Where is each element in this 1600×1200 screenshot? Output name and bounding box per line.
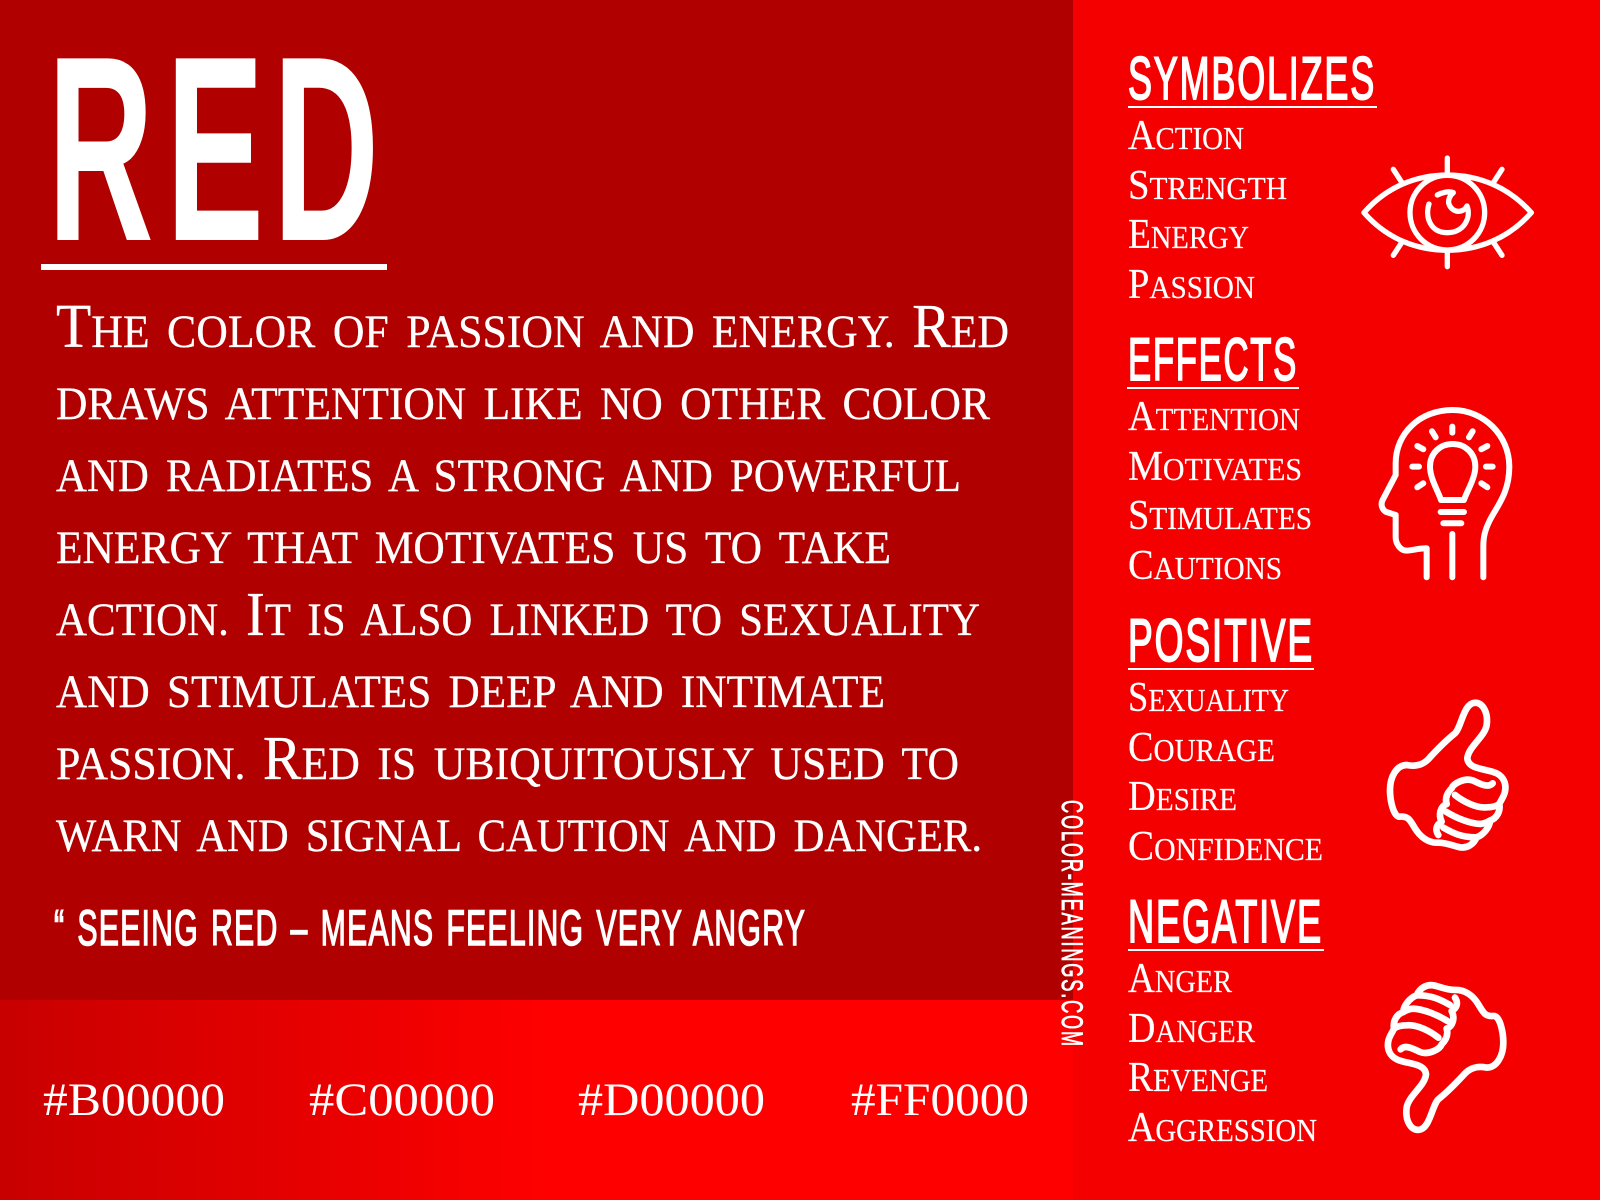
- section: negative: NEGATIVE: [1128, 888, 1323, 955]
- hex codes: [43, 1074, 1029, 1126]
- section: positive: POSITIVE: [1128, 607, 1314, 674]
- section: symbolizes: PASSION: [1128, 262, 1255, 308]
- icon: head with light bulb: [1382, 410, 1509, 577]
- section: negative: [1128, 888, 1324, 1151]
- website credit: COLOR-MEANINGS.COM: [1055, 800, 1088, 1048]
- section: symbolizes: SYMBOLIZES: [1128, 45, 1376, 112]
- hex codes: #C00000: [309, 1074, 495, 1126]
- section: effects: MOTIVATES: [1128, 444, 1302, 490]
- section: symbolizes: ACTION: [1128, 113, 1244, 159]
- left panel background: [0, 0, 1073, 1000]
- colour gradient band: [0, 1000, 1073, 1200]
- section: negative: ANGER: [1128, 956, 1233, 1002]
- section: negative: DANGER: [1128, 1006, 1256, 1052]
- section: positive: CONFIDENCE: [1128, 824, 1323, 870]
- description paragraph: WARN AND SIGNAL CAUTION AND DANGER.: [56, 810, 982, 862]
- section: symbolizes: ENERGY: [1128, 212, 1249, 258]
- description paragraph: PASSION. RED IS UBIQUITOUSLY USED TO: [56, 725, 959, 793]
- description paragraph: ACTION. IT IS ALSO LINKED TO SEXUALITY: [56, 581, 980, 649]
- description paragraph: ENERGY THAT MOTIVATES US TO TAKE: [56, 522, 891, 574]
- section: positive: [1128, 607, 1323, 870]
- section: effects: [1127, 326, 1312, 589]
- section: effects: EFFECTS: [1128, 326, 1298, 393]
- right panel background: [1073, 0, 1600, 1200]
- description paragraph: AND STIMULATES DEEP AND INTIMATE: [56, 666, 885, 718]
- hex codes: #B00000: [43, 1074, 225, 1126]
- section: positive: SEXUALITY: [1128, 675, 1289, 721]
- quote: “ SEEING RED – MEANS FEELING VERY ANGRY: [54, 900, 806, 956]
- section: positive: DESIRE: [1128, 774, 1237, 820]
- section: symbolizes: [1128, 45, 1377, 308]
- section: negative: AGGRESSION: [1128, 1105, 1317, 1151]
- hex codes: #D00000: [578, 1074, 765, 1126]
- description paragraph: AND RADIATES A STRONG AND POWERFUL: [56, 450, 961, 502]
- section: positive: COURAGE: [1128, 725, 1275, 771]
- icon: thumbs up: [1390, 703, 1505, 847]
- section: negative: REVENGE: [1128, 1055, 1268, 1101]
- section: effects: STIMULATES: [1128, 493, 1312, 539]
- section: effects: ATTENTION: [1128, 394, 1300, 440]
- description paragraph: DRAWS ATTENTION LIKE NO OTHER COLOR: [56, 378, 991, 430]
- section: effects: CAUTIONS: [1128, 543, 1282, 589]
- section: symbolizes: STRENGTH: [1128, 163, 1287, 209]
- hex codes: #FF0000: [851, 1074, 1029, 1126]
- title: RED: [48, 3, 379, 297]
- description paragraph: THE COLOR OF PASSION AND ENERGY. RED: [56, 293, 1009, 361]
- description paragraph: [56, 293, 1009, 862]
- icon: eye: [1364, 158, 1531, 267]
- icon: thumbs down: [1388, 985, 1503, 1130]
